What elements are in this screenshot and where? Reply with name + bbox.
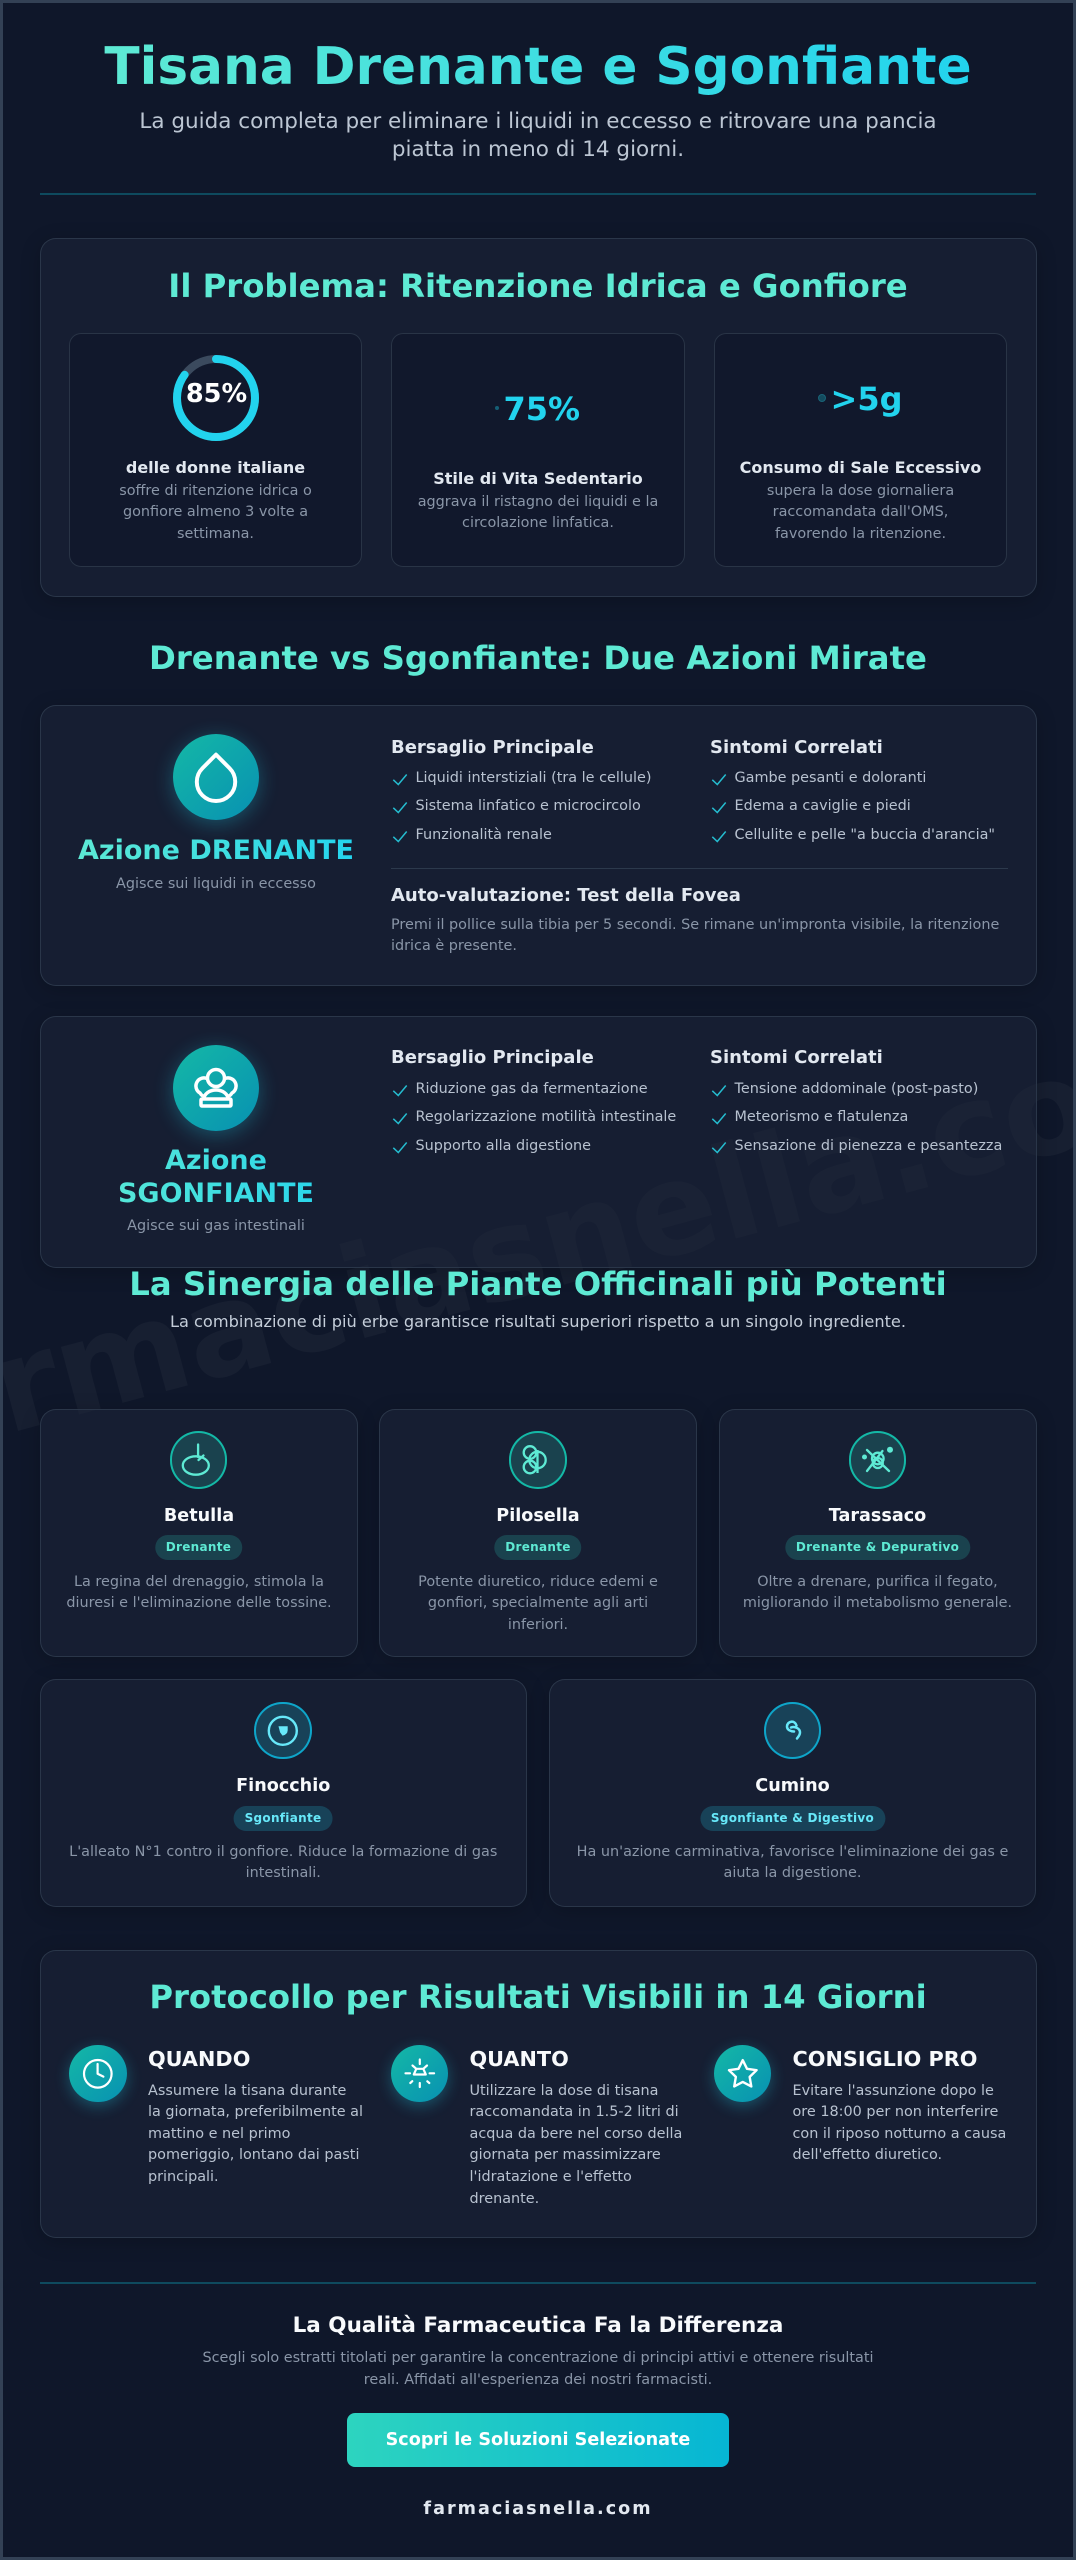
step heading: QUANTO: [470, 2046, 569, 2070]
list: sintomi: [712, 1080, 1002, 1154]
list: sintomi: Tensione addominale (post-pasto): [734, 1080, 978, 1096]
stat description: circolazione linfatica.: [462, 515, 614, 531]
text: test della fovea: Premi il pollice sulla tibia per 5 secondi. Se rimane un'impronta visibile, la ritenzione: [391, 917, 999, 933]
tag: [234, 1806, 332, 1831]
tag: [785, 1535, 970, 1560]
button: Scopri le Soluzioni Selezionate: [386, 2430, 690, 2450]
step: consiglio pro: [708, 2042, 1006, 2163]
stat number: 75%: 75%: [504, 390, 580, 428]
list: bersaglio: Riduzione gas da fermentazione: [416, 1080, 648, 1096]
panel: azione drenante: [40, 705, 1037, 986]
stat card: 85%: [69, 333, 362, 567]
herb description: Ha un'azione carminativa, favorisce l'eliminazione dei gas e: [577, 1844, 1008, 1860]
subtitle: La guida completa per eliminare i liquidi in eccesso e ritrovare una pancia: [139, 108, 937, 134]
herb name: Cumino: [755, 1776, 830, 1796]
action name: Azione: [165, 1145, 267, 1176]
herb description: [66, 1574, 332, 1611]
list: bersaglio: [392, 1080, 676, 1154]
step heading: QUANDO: [148, 2046, 250, 2070]
herb description: Potente diuretico, riduce edemi e: [418, 1574, 658, 1590]
step text: [470, 2083, 682, 2207]
tag: Drenante: [166, 1540, 231, 1554]
chart: 85% ring: [173, 355, 259, 441]
icon: dose: [390, 2044, 448, 2102]
icon: pilosella: [509, 1431, 567, 1489]
step text: [148, 2083, 363, 2185]
tag: Sgonfiante: [245, 1811, 321, 1825]
herb description: L'alleato N°1 contro il gonfiore. Riduce la formazione di gas: [69, 1844, 497, 1860]
icon: clock: [69, 2044, 127, 2102]
herb description: [69, 1844, 497, 1881]
step text: Assumere la tisana durante: [148, 2083, 346, 2099]
footer text: reali. Affidati all'esperienza dei nostri farmacisti.: [364, 2372, 712, 2388]
heading: bersaglio: Bersaglio Principale: [391, 1047, 594, 1068]
step heading: CONSIGLIO PRO: [792, 2046, 977, 2070]
stat description: settimana.: [177, 526, 254, 542]
brand: farmaciasnella.com: [423, 2499, 653, 2519]
step text: giornata per massimizzare: [470, 2147, 661, 2163]
footer heading: La Qualità Farmaceutica Fa la Differenza: [293, 2312, 783, 2338]
panel: finocchio: [40, 1679, 526, 1907]
heading: auto-valutazione: Auto-valutazione: Test della Fovea: [391, 884, 741, 906]
stat number: 85%: 85%: [186, 379, 247, 409]
tag: Drenante: [505, 1540, 571, 1554]
panel: betulla: [40, 1409, 358, 1657]
panel: azione sgonfiante: [40, 1016, 1037, 1268]
heading: sintomi: Sintomi Correlati: [710, 737, 883, 758]
title: Tisana Drenante e Sgonfiante: [104, 37, 972, 97]
icon: tarassaco: [849, 1431, 906, 1489]
list: sintomi: Cellulite e pelle "a buccia d'arancia": [734, 827, 995, 843]
tag: [700, 1806, 885, 1831]
stat description: gonfiore almeno 3 volte a: [123, 504, 308, 520]
step text: principali.: [148, 2169, 219, 2185]
list: sintomi: Meteorismo e flatulenza: [734, 1109, 908, 1125]
list: bersaglio: [392, 770, 651, 843]
text: test della fovea: idrica è presente.: [391, 938, 517, 954]
stat description: soffre di ritenzione idrica o: [119, 483, 312, 499]
stat description: [418, 494, 658, 531]
stat label: Stile di Vita Sedentario: [433, 469, 643, 488]
panel: pilosella: [379, 1409, 697, 1657]
panel: il problema: [40, 238, 1037, 597]
herb description: [743, 1574, 1012, 1611]
tag: [494, 1535, 582, 1560]
herb name: Betulla: [164, 1506, 234, 1526]
stat description: aggrava il ristagno dei liquidi e la: [418, 494, 658, 510]
stat card: >5g: [714, 333, 1007, 567]
stat number: >5g: >5g: [830, 380, 902, 418]
herb description: aiuta la digestione.: [724, 1865, 861, 1881]
list: bersaglio: Funzionalità renale: [416, 827, 552, 843]
stat description: raccomandata dall'OMS,: [773, 504, 948, 520]
footer text: Scegli solo estratti titolati per garantire la concentrazione di principi attivi e ottenere risultati: [202, 2350, 874, 2366]
panel: cumino: [549, 1679, 1036, 1907]
herb description: migliorando il metabolismo generale.: [743, 1595, 1012, 1611]
icon: dot: [495, 406, 499, 410]
stat description: favorendo la ritenzione.: [775, 526, 946, 542]
stat description: supera la dose giornaliera: [767, 483, 954, 499]
icon: betulla: [170, 1431, 227, 1489]
heading: due azioni: Drenante vs Sgonfiante: Due Azioni Mirate: [149, 639, 927, 677]
heading: protocollo: Protocollo per Risultati Visibili in 14 Giorni: [149, 1978, 927, 2016]
heading: sintomi: Sintomi Correlati: [710, 1047, 883, 1068]
icon: gas: [173, 1045, 259, 1131]
herb description: intestinali.: [246, 1865, 321, 1881]
stat label: delle donne italiane: [126, 458, 305, 476]
heading: sinergia: La Sinergia delle Piante Officinali più Potenti: [129, 1265, 947, 1303]
panel: tarassaco: [718, 1409, 1036, 1657]
herb description: inferiori.: [508, 1617, 568, 1633]
step text: l'idratazione e l'effetto: [470, 2169, 632, 2185]
herb name: Pilosella: [496, 1506, 580, 1526]
list: sintomi: [712, 770, 995, 843]
list: sintomi: Edema a caviglie e piedi: [734, 798, 911, 814]
herb name: Tarassaco: [829, 1506, 926, 1526]
step text: Evitare l'assunzione dopo le: [792, 2083, 994, 2099]
herb description: La regina del drenaggio, stimola la: [74, 1574, 324, 1590]
button: [347, 2413, 729, 2467]
action name: Azione DRENANTE: [78, 835, 354, 866]
step text: dell'effetto diuretico.: [792, 2147, 942, 2163]
panel: protocollo: [40, 1950, 1037, 2238]
herb description: [577, 1844, 1008, 1881]
step text: Utilizzare la dose di tisana: [470, 2083, 658, 2099]
herb description: [418, 1574, 658, 1633]
list: bersaglio: Sistema linfatico e microcircolo: [416, 798, 641, 814]
list: sintomi: Gambe pesanti e doloranti: [734, 770, 926, 786]
step text: [792, 2083, 1006, 2163]
text: test della fovea: [391, 917, 999, 954]
heading: bersaglio: Bersaglio Principale: [391, 737, 594, 758]
action name: SGONFIANTE: [118, 1178, 314, 1208]
stat card: 75%: [391, 333, 685, 567]
step text: acqua da bere nel corso della: [470, 2126, 682, 2142]
step text: drenante.: [470, 2191, 539, 2207]
step text: con il riposo notturno a causa: [792, 2126, 1006, 2142]
footer text: [202, 2350, 874, 2388]
stat description: [119, 483, 312, 542]
stat label: Consumo di Sale Eccessivo: [740, 458, 981, 476]
list: bersaglio: Regolarizzazione motilità intestinale: [416, 1109, 676, 1125]
tag: Drenante & Depurativo: [796, 1540, 959, 1554]
tag: [155, 1535, 242, 1560]
herb description: gonfiori, specialmente agli arti: [428, 1595, 648, 1611]
icon: finocchio: [254, 1702, 312, 1759]
tag: Sgonfiante & Digestivo: [711, 1811, 874, 1825]
subtitle: [139, 108, 937, 162]
step: quanto: [384, 2042, 682, 2207]
action name: [76, 1145, 356, 1210]
action subtitle: Agisce sui gas intestinali: [127, 1218, 305, 1234]
icon: star: [714, 2044, 771, 2102]
herb description: diuresi e l'eliminazione delle tossine.: [66, 1595, 332, 1611]
list: bersaglio: Supporto alla digestione: [416, 1138, 591, 1154]
step text: raccomandata in 1.5-2 litri di: [470, 2104, 679, 2120]
herb description: Oltre a drenare, purifica il fegato,: [757, 1574, 998, 1590]
list: sintomi: Sensazione di pienezza e pesantezza: [734, 1138, 1002, 1154]
step text: pomeriggio, lontano dai pasti: [148, 2147, 359, 2163]
herb name: Finocchio: [236, 1776, 330, 1796]
icon: cumino: [764, 1702, 821, 1759]
step text: ore 18:00 per non interferire: [792, 2104, 998, 2120]
step text: la giornata, preferibilmente al: [148, 2104, 363, 2120]
step text: mattino e nel primo: [148, 2126, 290, 2142]
step: quando: [62, 2042, 363, 2185]
action subtitle: Agisce sui liquidi in eccesso: [116, 876, 316, 892]
list: bersaglio: Liquidi interstiziali (tra le cellule): [416, 770, 651, 786]
icon: water drop: [173, 734, 259, 820]
heading: il problema: Il Problema: Ritenzione Idrica e Gonfiore: [168, 267, 908, 305]
stat description: [767, 483, 954, 542]
text: sinergia subtitle: La combinazione di più erbe garantisce risultati superiori rispetto a un singolo ingrediente.: [170, 1312, 906, 1330]
subtitle: piatta in meno di 14 giorni.: [392, 137, 684, 162]
icon: dot: [818, 394, 826, 402]
